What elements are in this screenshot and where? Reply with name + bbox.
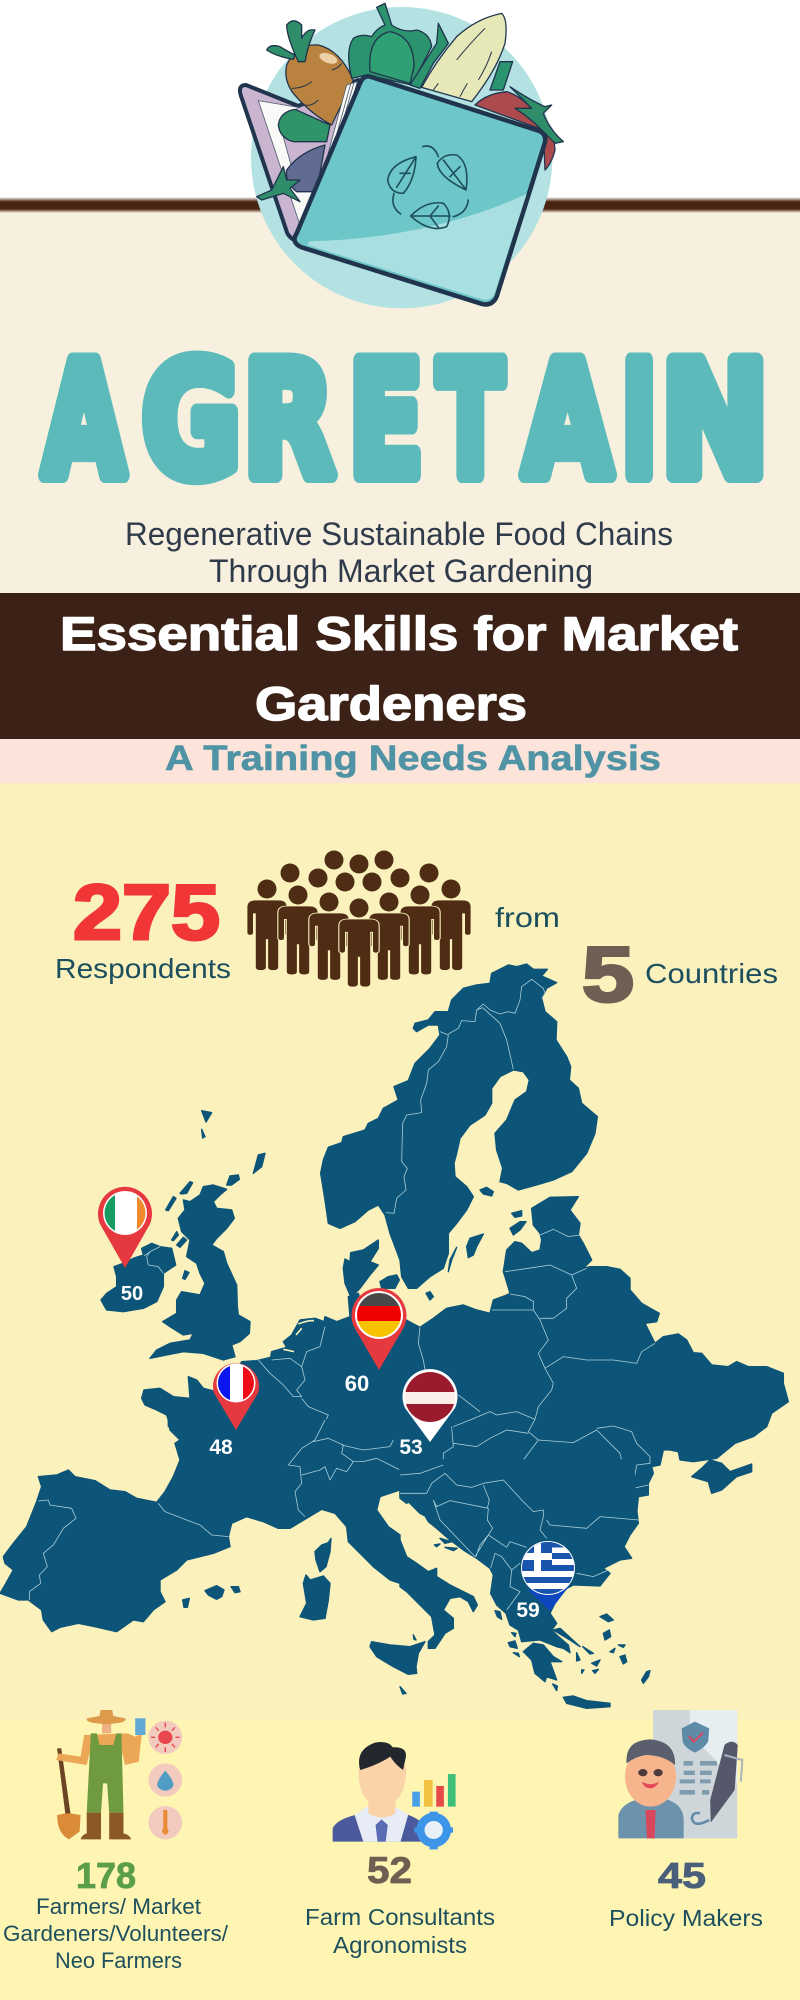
title: AGRETAIN: I: [621, 330, 657, 513]
head and hat: [102, 1720, 111, 1733]
front pages: [306, 82, 357, 238]
title: AGRETAIN: A: [43, 330, 125, 513]
overalls: [87, 1733, 123, 1813]
heading line 1: Essential Skills for Market: [60, 607, 738, 660]
number 5: 5: [582, 930, 634, 1018]
pin: France 48: [209, 1362, 259, 1459]
cover light lower part: [307, 194, 527, 300]
cucumber: [278, 109, 330, 142]
shirt: [355, 1807, 408, 1842]
label consultants: [305, 1904, 495, 1958]
label consultants: Agronomists: [333, 1932, 467, 1958]
document: [653, 1710, 737, 1838]
number 178: 178: [76, 1855, 136, 1896]
stat: 52 consultants: [305, 1850, 495, 1958]
pin: Ireland 50: [98, 1187, 152, 1305]
number 275: 275: [73, 868, 220, 956]
Poland, Baltics, Belarus and Ukraine: [400, 1197, 788, 1520]
background: yellow map panel: [0, 783, 800, 1721]
eggplant leaf: [257, 167, 300, 202]
tomato: [475, 87, 563, 170]
logo background circle: [251, 7, 552, 308]
title: AGRETAIN: T: [437, 330, 503, 513]
boots: [81, 1813, 131, 1839]
background: cream header panel: [0, 210, 800, 593]
front cover of book: [295, 76, 545, 304]
value 50: 50: [121, 1283, 143, 1305]
value 48: 48: [209, 1436, 233, 1459]
white inner pages: [258, 101, 313, 235]
text: from: from: [495, 902, 560, 933]
document lines: [680, 1761, 717, 1795]
stat: 275 respondents: [55, 868, 231, 984]
farmer body: [56, 1733, 142, 1765]
face: [625, 1747, 676, 1807]
label farmers: Gardeners/Volunteers/: [3, 1921, 229, 1946]
icon: farm consultant with chart and gear: [333, 1742, 456, 1849]
icon: farmer with weather symbols: [56, 1710, 182, 1839]
pin: Latvia 53: [399, 1369, 458, 1459]
tie: [376, 1819, 388, 1842]
title: AGRETAIN: N: [661, 330, 769, 513]
pin: Greece 59: [516, 1541, 575, 1622]
label farmers: Neo Farmers: [55, 1948, 182, 1973]
label farmers: Farmers/ Market: [36, 1894, 201, 1919]
title: AGRETAIN: R: [243, 330, 334, 513]
stat: 45 policy makers: [609, 1855, 763, 1931]
icon: crowd of people: [247, 850, 471, 987]
corn: [410, 13, 513, 102]
icon: policy maker with document and pen: [618, 1710, 742, 1838]
gear: [414, 1812, 453, 1849]
pen: [692, 1742, 742, 1824]
value 60: 60: [345, 1371, 369, 1396]
sub-heading band: [0, 739, 800, 783]
subtitle: [125, 516, 673, 589]
hair: [626, 1739, 675, 1765]
carrot: [267, 21, 353, 125]
back cover of book: [240, 80, 358, 241]
pepper: [349, 3, 432, 85]
tie: [645, 1810, 656, 1838]
background: bottom stats panel: [0, 1720, 800, 2000]
bar chart: [412, 1774, 456, 1807]
title: AGRETAIN: G: [142, 330, 241, 513]
value 53: 53: [399, 1436, 423, 1459]
recycle leaves icon: [388, 146, 468, 229]
sun badge: [148, 1721, 182, 1754]
drop badge: [148, 1763, 182, 1797]
subtitle line 1: Regenerative Sustainable Food Chains: [125, 516, 673, 552]
label policy makers: Policy Makers: [609, 1905, 763, 1931]
phone: [135, 1718, 145, 1735]
pin: Germany 60: [345, 1288, 406, 1396]
suit: [333, 1813, 429, 1842]
hair: [359, 1742, 406, 1770]
Scandinavia and Baltic islands: [321, 964, 597, 1300]
stat: 5 countries: [582, 930, 778, 1018]
shield: [682, 1722, 709, 1753]
subtitle line 2: Through Market Gardening: [209, 553, 593, 589]
background: white top band: [0, 0, 800, 198]
title: AGRETAIN: A: [523, 330, 612, 513]
sub-heading text: A Training Needs Analysis: [165, 739, 661, 778]
northern France, Benelux and Germany: [142, 1293, 420, 1443]
number 52: 52: [367, 1850, 412, 1891]
logo: book with vegetables: [240, 3, 563, 308]
label respondents: Respondents: [55, 953, 231, 984]
label farmers: [3, 1894, 229, 1973]
heading line 2: Gardeners: [255, 677, 527, 730]
eggplant: [286, 145, 325, 192]
title: AGRETAIN: E: [349, 330, 423, 513]
brown wood strip: [0, 197, 800, 213]
map of Europe: [0, 964, 788, 1708]
Iberia, southern France and northern Italy: [0, 1420, 400, 1632]
label countries: Countries: [645, 958, 778, 989]
Balkans, Greece and southern Italy: [370, 1460, 650, 1708]
smile: [642, 1782, 659, 1788]
label consultants: Farm Consultants: [305, 1904, 495, 1930]
number 45: 45: [658, 1855, 706, 1896]
stat: 178 farmers: [3, 1855, 229, 1973]
value 59: 59: [516, 1599, 540, 1622]
shovel: [57, 1748, 81, 1839]
thermometer badge: [148, 1806, 182, 1839]
person body: [618, 1798, 684, 1838]
heading text: [60, 607, 738, 730]
heading band: [0, 593, 800, 739]
face: [358, 1755, 406, 1817]
Denmark: [343, 1240, 399, 1295]
Great Britain and Ireland: [101, 1111, 265, 1360]
